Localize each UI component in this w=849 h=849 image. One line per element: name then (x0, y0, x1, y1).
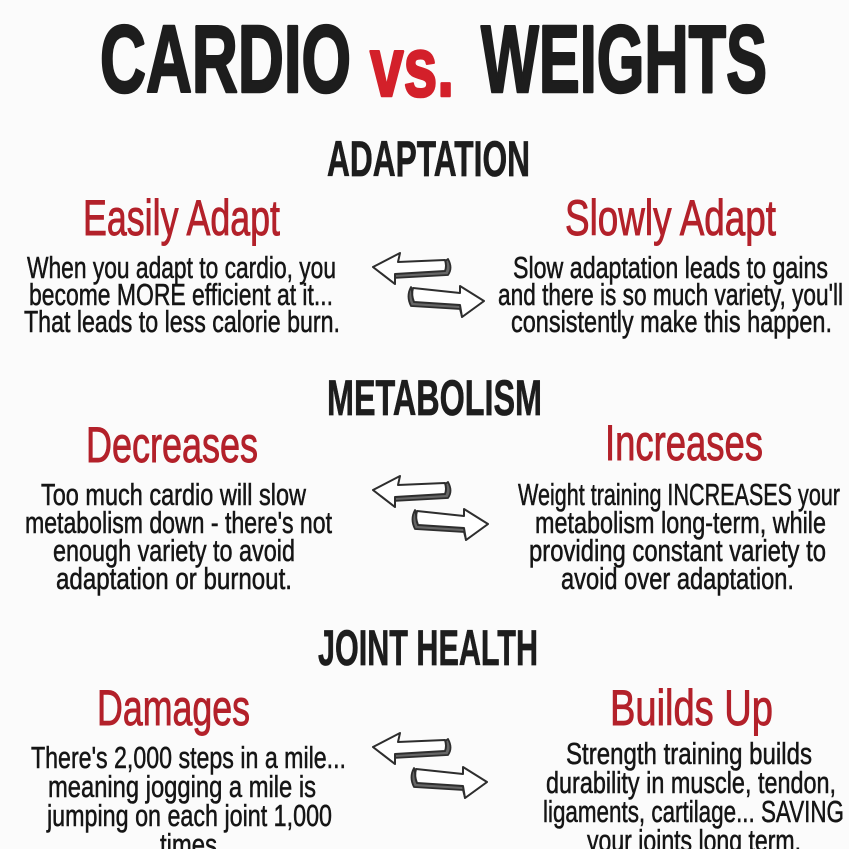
subheading: easily adapt: Easily Adapt (83, 190, 280, 246)
subheading: increases: Increases (605, 415, 763, 471)
title: vs. (370, 20, 454, 114)
subheading: slowly adapt: Slowly Adapt (565, 190, 776, 246)
text block: cardio joint health: There's 2,000 steps in a mile... (31, 740, 346, 775)
subheading: builds up: Builds Up (610, 680, 773, 736)
text block: cardio metabolism: enough variety to avoid (53, 533, 295, 568)
text block: cardio adaptation: That leads to less calorie burn. (24, 304, 340, 339)
text block: cardio metabolism: metabolism down - there's not (25, 505, 332, 540)
text block: cardio metabolism (25, 477, 332, 596)
text block: weights joint health (543, 736, 844, 849)
arrows: metabolism (373, 476, 488, 540)
text block: cardio joint health: meaning jogging a mile is (48, 769, 316, 804)
text block: cardio adaptation: When you adapt to cardio, you (27, 250, 336, 285)
heading: metabolism: METABOLISM (327, 370, 542, 426)
heading: joint health: JOINT HEALTH (318, 620, 538, 676)
subheading: decreases: Decreases (86, 417, 258, 473)
text block: cardio adaptation (24, 250, 340, 339)
text block: cardio adaptation: become MORE efficient at it... (29, 277, 333, 312)
arrows: adaptation (373, 253, 484, 317)
text block: cardio joint health (31, 740, 346, 849)
heading: adaptation: ADAPTATION (327, 131, 530, 187)
title (100, 6, 767, 114)
text block: weights adaptation (498, 250, 843, 339)
subheading: damages: Damages (97, 680, 250, 736)
text block: weights metabolism (518, 477, 840, 596)
text block: cardio metabolism: adaptation or burnout. (56, 561, 292, 596)
title: CARDIO (100, 6, 351, 113)
text block: cardio metabolism: Too much cardio will slow (41, 477, 306, 512)
arrows: joint health (373, 733, 487, 798)
text block: cardio joint health: jumping on each joint 1,000 (46, 798, 332, 833)
